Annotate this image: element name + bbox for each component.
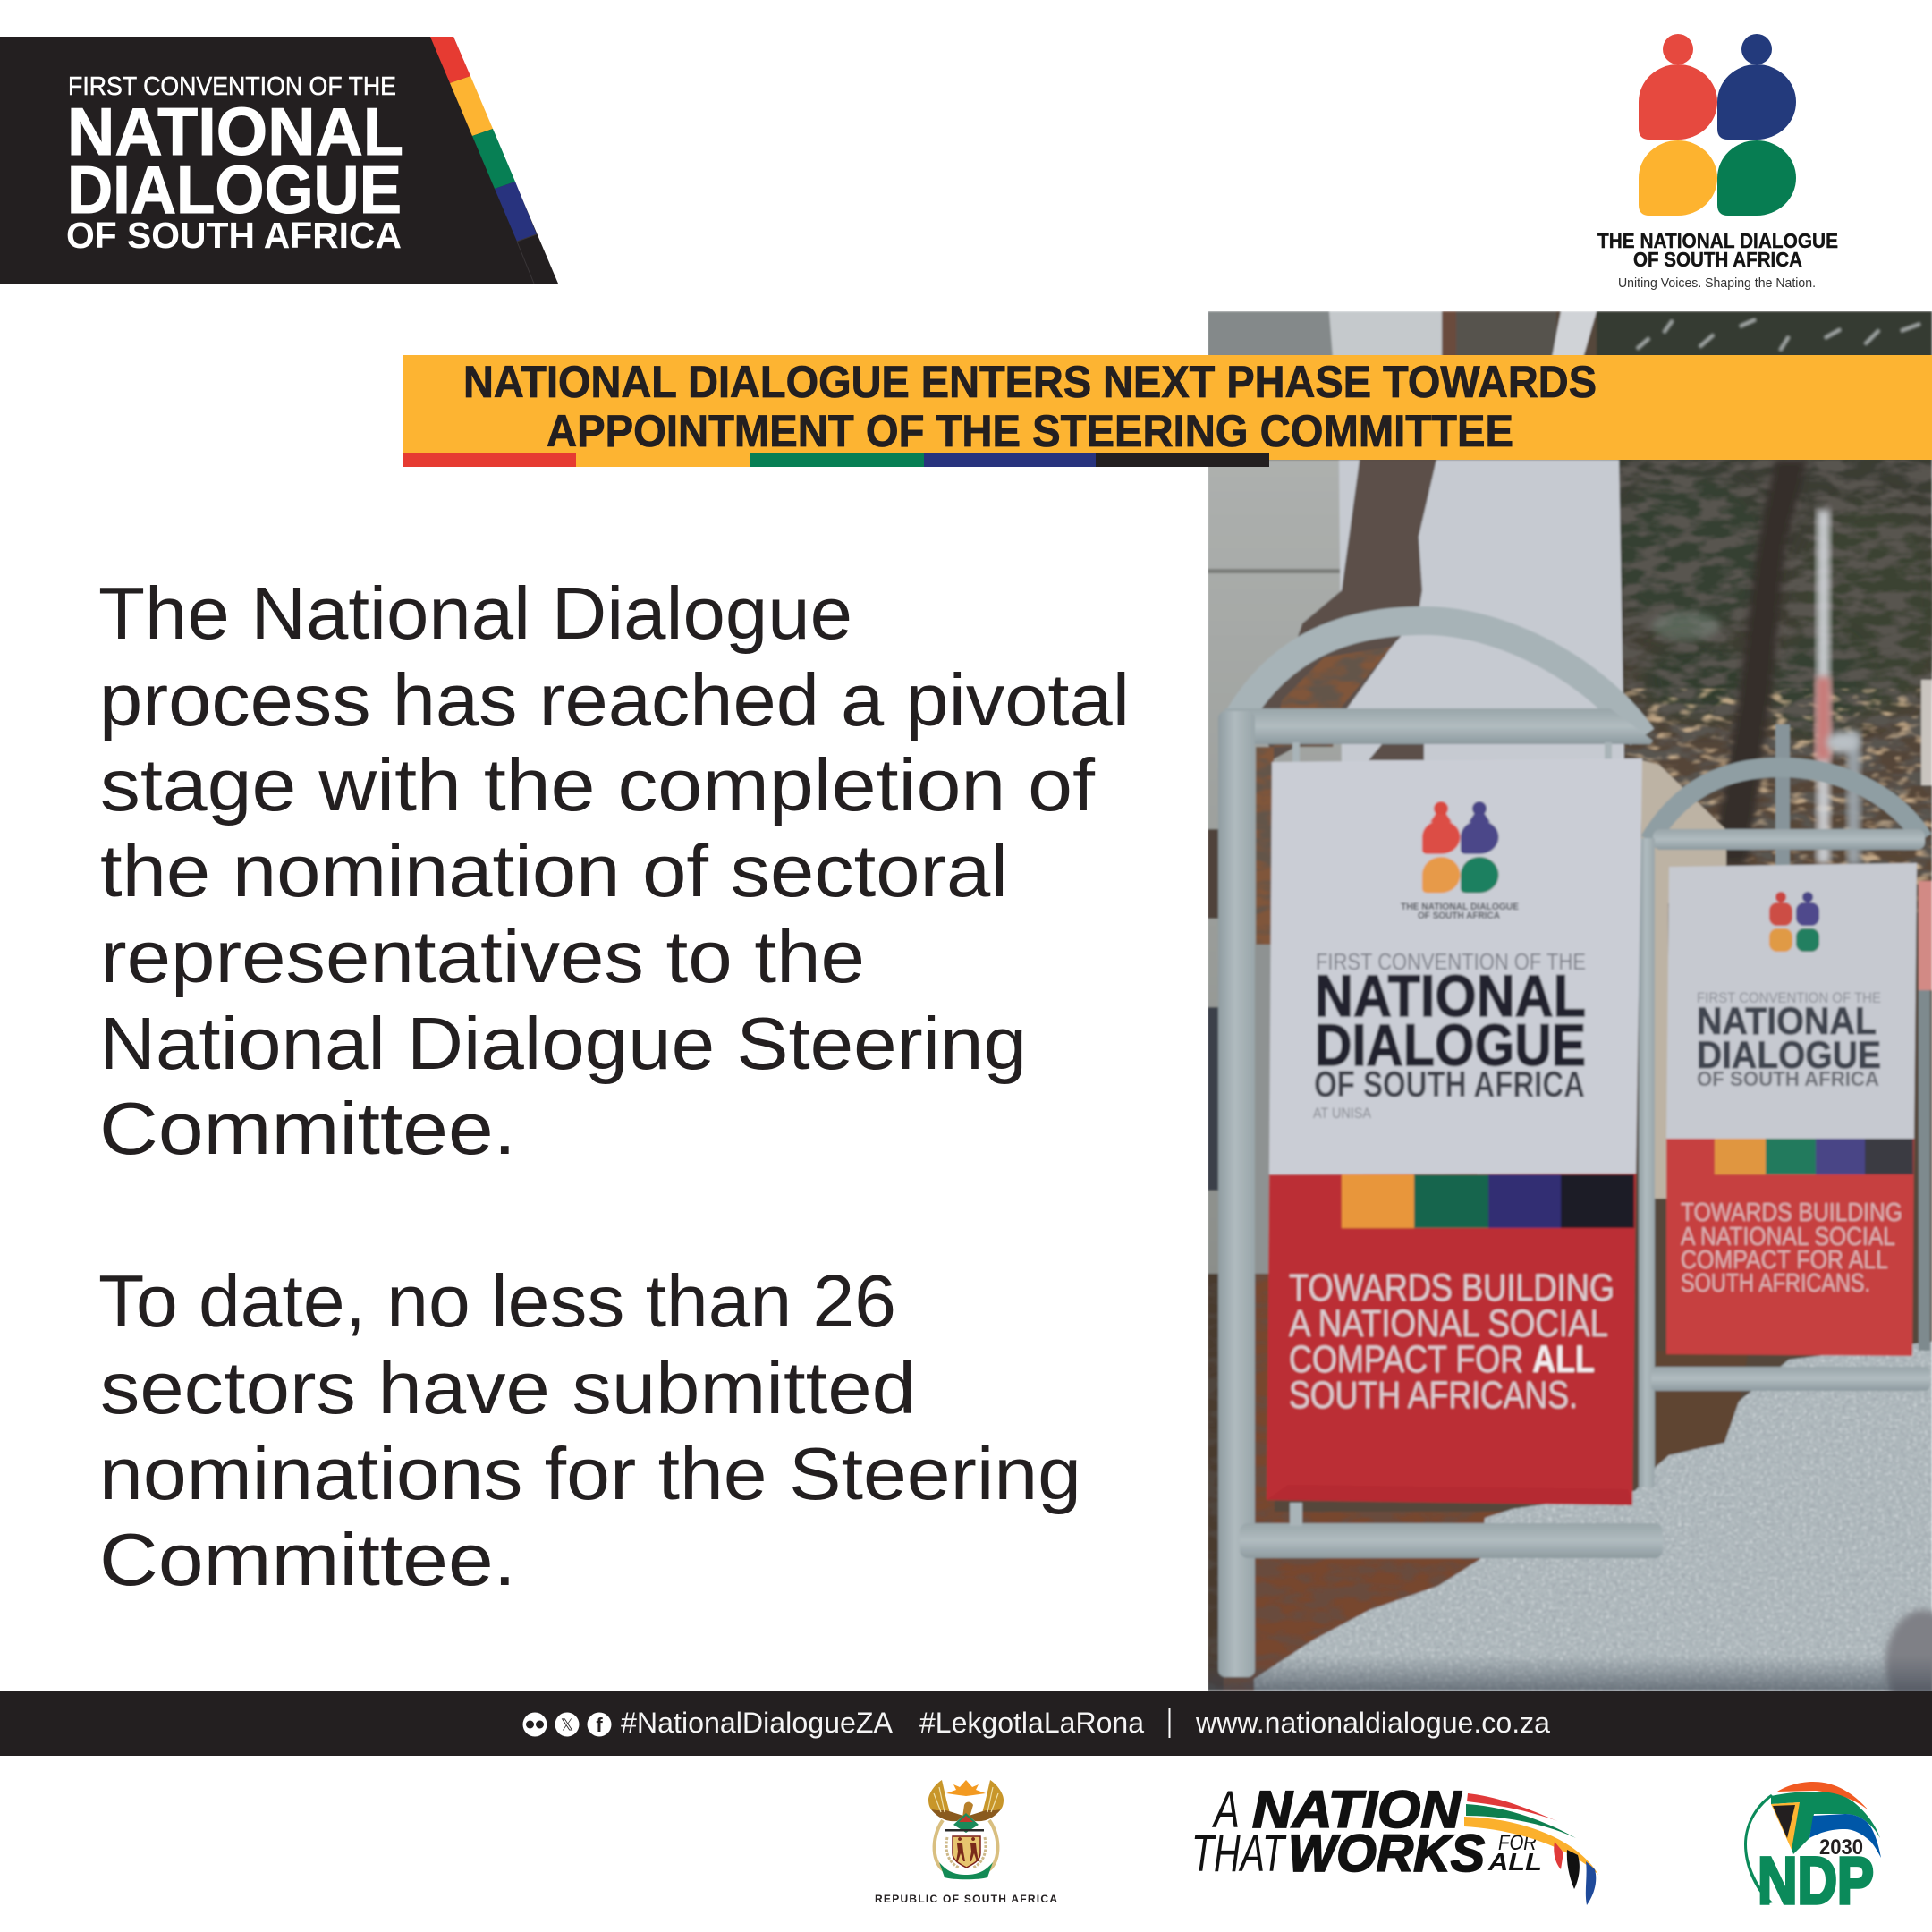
logo: The National Dialogue of South Africa: OF SOUTH AFRICA <box>1633 248 1802 271</box>
footer social bar: www.nationaldialogue.co.za <box>1195 1707 1550 1739</box>
header badge: First Convention of the National Dialogue: FIRST CONVENTION OF THE <box>68 72 396 101</box>
icon: X: 𝕏 <box>561 1716 573 1733</box>
icon: X <box>555 1712 580 1737</box>
body paragraph one: National Dialogue Steering <box>99 1002 1027 1085</box>
logo: NDP 2030 <box>1744 1782 1881 1918</box>
body paragraph one: representatives to the <box>100 915 865 998</box>
logo: A Nation That Works For All: NATION <box>1252 1781 1462 1839</box>
logo: A Nation That Works For All: FOR <box>1498 1831 1537 1855</box>
footer social bar <box>0 1690 1932 1756</box>
photo background: trees and leaf litter <box>1269 311 1932 1513</box>
headline banner <box>402 355 1932 467</box>
footer social bar: #NationalDialogueZA <box>621 1707 894 1739</box>
body paragraph one: stage with the completion of <box>100 743 1096 826</box>
logo: Republic of South Africa coat of arms <box>875 1780 1057 1905</box>
sign logo: OF SOUTH AFRICA <box>1418 911 1500 921</box>
body paragraph two: Committee. <box>99 1518 516 1601</box>
header badge: First Convention of the National Dialogue: OF SOUTH AFRICA <box>66 215 402 256</box>
icon: facebook: f <box>596 1714 603 1736</box>
sign title: OF SOUTH AFRICA <box>1314 1063 1585 1105</box>
footer social bar: #LekgotlaLaRona <box>919 1707 1144 1739</box>
logo: The National Dialogue of South Africa: Uniting Voices. Shaping the Nation. <box>1618 276 1816 291</box>
body paragraph two: nominations for the Steering <box>99 1432 1081 1515</box>
photo: signboards at the convention venue <box>1208 311 1932 1717</box>
sign slogan: SOUTH AFRICANS. <box>1289 1374 1578 1417</box>
top photo strip <box>1208 311 1923 355</box>
icon: tusks <box>935 1820 997 1871</box>
walls <box>1208 460 1624 1283</box>
icon: colour swooshes <box>1464 1793 1598 1905</box>
far signboard: COMPACT FOR ALL <box>1681 1246 1888 1275</box>
far signboard: A NATIONAL SOCIAL <box>1681 1223 1895 1251</box>
icon: ribbon <box>939 1862 993 1879</box>
icon: wings <box>928 1780 1004 1821</box>
header badge: First Convention of the National Dialogue: NATIONAL <box>67 94 403 169</box>
sign slogan <box>1289 1267 1614 1417</box>
body paragraph one: Committee. <box>99 1087 516 1170</box>
body paragraph one <box>98 572 1130 1170</box>
logo: A Nation That Works For All: ALL <box>1487 1848 1542 1876</box>
near signboard <box>1218 621 1663 1677</box>
icon: flickr <box>522 1712 547 1737</box>
tree trunk and brown base <box>1208 460 1436 948</box>
icon: spear <box>945 1829 984 1832</box>
icon: sun <box>946 1780 986 1796</box>
earth and bush <box>1208 1274 1749 1690</box>
logo: A Nation That Works For All <box>1191 1781 1598 1905</box>
logo: NDP 2030: 2030 <box>1819 1835 1863 1860</box>
far signboard: OF SOUTH AFRICA <box>1697 1067 1879 1090</box>
body paragraph one: the nomination of sectoral <box>100 829 1008 912</box>
body paragraph one: The National Dialogue <box>98 572 852 655</box>
sign title <box>1313 948 1586 1122</box>
far signboard: NATIONAL <box>1697 1000 1877 1043</box>
icon: wheat <box>946 1837 986 1868</box>
trunk and pole behind signs <box>1641 460 1932 1199</box>
body paragraph two: To date, no less than 26 <box>98 1259 896 1343</box>
gravel path <box>1208 1342 1932 1717</box>
logo: A Nation That Works For All: A <box>1212 1781 1240 1839</box>
sign title: DIALOGUE <box>1315 1012 1586 1078</box>
logo: The National Dialogue of South Africa: THE NATIONAL DIALOGUE <box>1597 229 1838 252</box>
header badge: First Convention of the National Dialogue <box>0 37 558 284</box>
icon: shield <box>953 1836 980 1868</box>
far signboard: FIRST CONVENTION OF THE <box>1697 989 1881 1006</box>
sign title: FIRST CONVENTION OF THE <box>1316 948 1586 975</box>
body paragraph one: process has reached a pivotal <box>99 658 1130 741</box>
logo: NDP 2030: NDP <box>1758 1843 1874 1918</box>
far signboard <box>1639 767 1932 1487</box>
body paragraph two <box>98 1259 1081 1601</box>
headline banner: NATIONAL DIALOGUE ENTERS NEXT PHASE TOWARDS <box>463 357 1597 407</box>
far signboard: SOUTH AFRICANS. <box>1681 1269 1870 1298</box>
sign logo <box>1401 801 1519 921</box>
sign title: NATIONAL <box>1315 962 1586 1029</box>
icon: diamond <box>953 1813 979 1833</box>
sign slogan: TOWARDS BUILDING <box>1289 1267 1614 1309</box>
icon: facebook <box>587 1712 612 1737</box>
sign logo: THE NATIONAL DIALOGUE <box>1401 902 1519 912</box>
body paragraph two: sectors have submitted <box>100 1346 916 1429</box>
headline banner: APPOINTMENT OF THE STEERING COMMITTEE <box>547 406 1513 456</box>
logo: Republic of South Africa coat of arms: REPUBLIC OF SOUTH AFRICA <box>875 1893 1057 1905</box>
sign slogan: A NATIONAL SOCIAL <box>1289 1302 1608 1345</box>
logo: A Nation That Works For All: THAT <box>1191 1825 1287 1883</box>
far signboard: DIALOGUE <box>1697 1034 1881 1077</box>
sign slogan: COMPACT FOR ALL <box>1289 1338 1595 1381</box>
logo: The National Dialogue of South Africa <box>1597 34 1838 291</box>
header badge: First Convention of the National Dialogue: DIALOGUE <box>67 152 402 227</box>
sign title: AT UNISA <box>1313 1105 1372 1122</box>
logo: A Nation That Works For All: WORKS <box>1288 1825 1485 1883</box>
